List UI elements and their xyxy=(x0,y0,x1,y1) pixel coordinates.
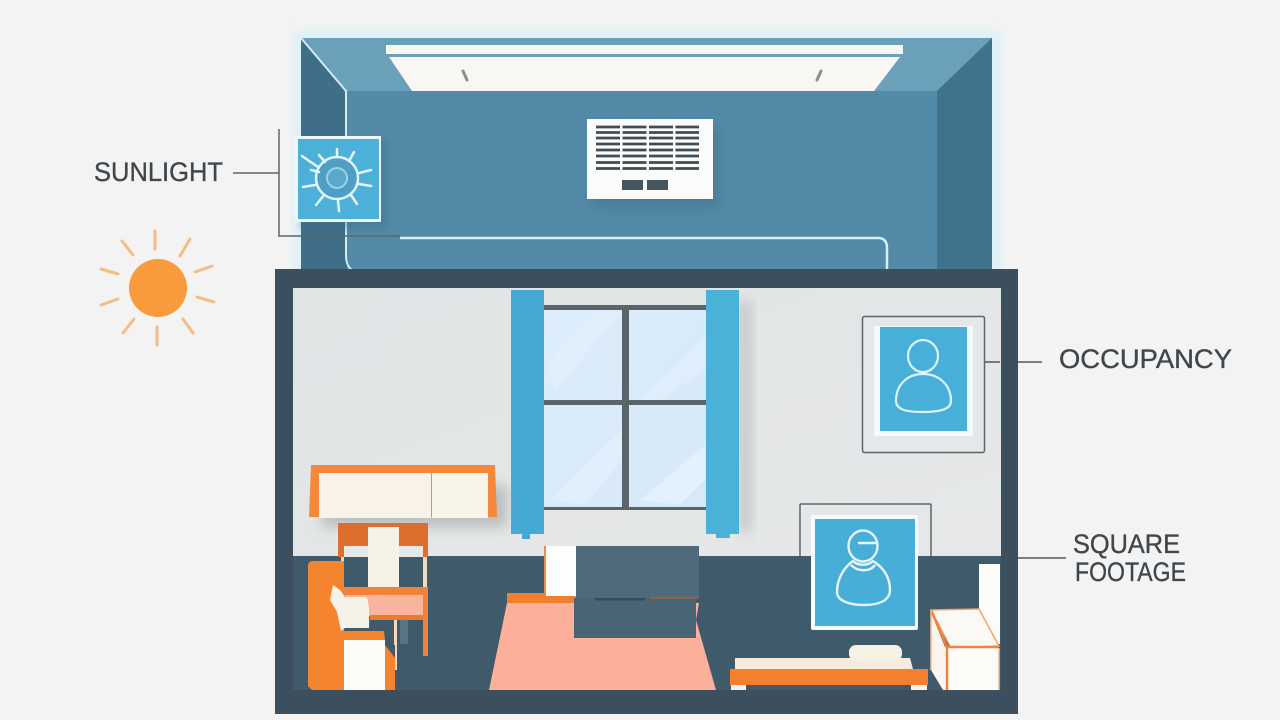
lower room frame and wall xyxy=(275,269,1018,714)
orange sun icon xyxy=(101,231,214,345)
bed xyxy=(730,645,928,690)
floor xyxy=(293,556,1001,690)
occupancy callout line xyxy=(985,361,1042,363)
sunlight icon tile xyxy=(295,136,388,230)
right side wall xyxy=(937,38,992,270)
cabinet xyxy=(309,465,507,527)
rug xyxy=(489,603,716,690)
ceiling xyxy=(301,38,992,91)
sunlight label: SUNLIGHT xyxy=(94,157,223,187)
sunlight callout line xyxy=(233,129,400,236)
sofa xyxy=(507,546,699,638)
air conditioner unit xyxy=(587,119,719,208)
desk and chair xyxy=(308,523,428,690)
square footage label: SQUARE xyxy=(1073,529,1180,559)
storage box xyxy=(931,564,1000,690)
square footage label xyxy=(1073,529,1186,587)
blue curtains xyxy=(511,290,752,539)
occupancy label: OCCUPANCY xyxy=(1059,344,1232,374)
upper room: ceiling and walls xyxy=(301,38,992,270)
left side wall xyxy=(301,38,347,270)
square footage picture frame with person icon xyxy=(800,504,931,630)
square footage label: FOOTAGE xyxy=(1075,557,1186,587)
ceiling light panel xyxy=(386,45,903,91)
window xyxy=(543,305,706,510)
square footage callout line xyxy=(1018,557,1066,559)
occupancy picture frame with person icon xyxy=(862,316,984,452)
